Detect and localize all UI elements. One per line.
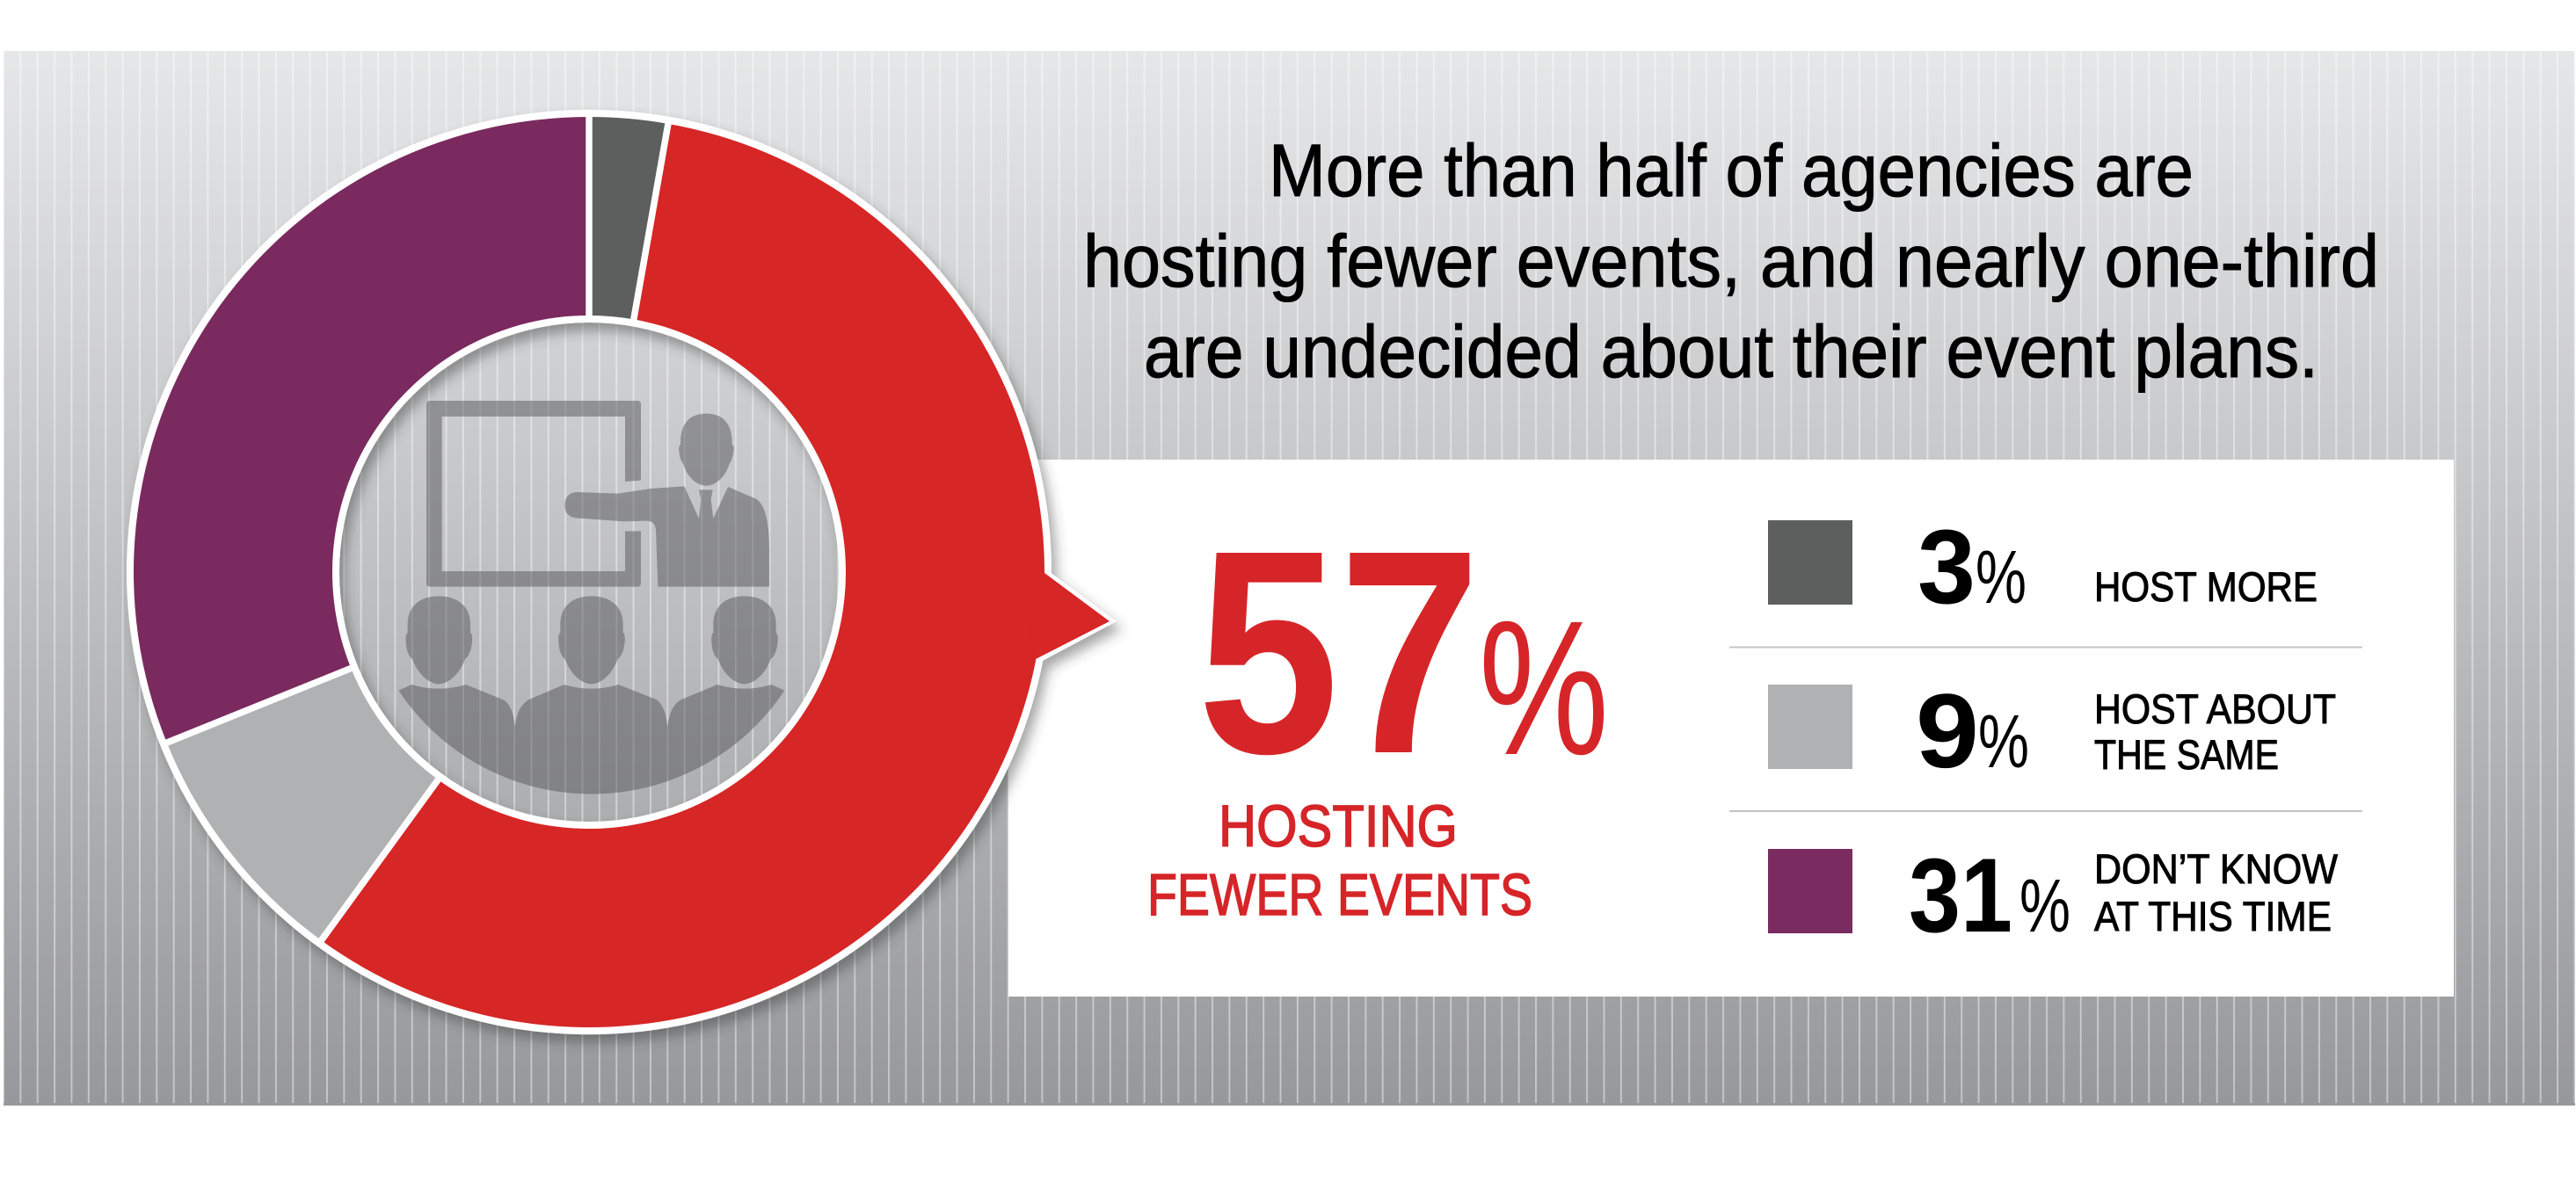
icon: presenter — [564, 414, 769, 587]
big stat: 57% hosting fewer events: FEWER EVENTS — [1147, 862, 1532, 928]
legend row: host more: 3 — [1917, 508, 1976, 626]
segment: hosting fewer events 57% — [322, 124, 1044, 1027]
divider — [1729, 647, 2362, 649]
icon: audience — [398, 596, 784, 794]
big stat: 57% hosting fewer events: % — [1479, 582, 1609, 795]
panel: white results panel — [1008, 460, 2454, 997]
callout pointer — [1029, 570, 1110, 660]
legend row: don't know at this time — [1768, 837, 2339, 954]
segment: don't know 31% — [134, 117, 589, 743]
legend row: host more: % — [1976, 536, 2027, 620]
legend row: don't know at this time: 31 — [1909, 837, 2012, 954]
legend row: host about the same — [1768, 672, 2336, 790]
segment dividers — [163, 112, 669, 944]
legend row: host more: HOST MORE — [2094, 563, 2318, 610]
legend row: don't know at this time: % — [2019, 865, 2070, 948]
big stat: 57% hosting fewer events — [1147, 489, 1609, 928]
heading: are undecided about their event plans. — [1144, 310, 2318, 393]
legend row: host more — [1768, 508, 2318, 626]
legend row: don't know at this time: AT THIS TIME — [2094, 893, 2332, 939]
legend row: host about the same: 9 — [1916, 672, 1979, 790]
divider — [1729, 810, 2362, 812]
donut chart with callout pointer — [127, 110, 1117, 1034]
legend row: don't know at this time: DON’T KNOW — [2094, 845, 2339, 892]
big stat: 57% hosting fewer events: 57 — [1197, 489, 1481, 814]
icon: presentation board — [426, 401, 641, 587]
legend row: host about the same: HOST ABOUT — [2094, 685, 2336, 732]
heading: hosting fewer events, and nearly one-third — [1083, 220, 2379, 302]
heading — [1083, 129, 2379, 393]
icon: presenter and audience — [398, 401, 784, 794]
big stat: 57% hosting fewer events: HOSTING — [1219, 794, 1458, 859]
legend row: host about the same: THE SAME — [2094, 731, 2279, 778]
legend row: host about the same: % — [1978, 700, 2029, 784]
heading: More than half of agencies are — [1269, 129, 2194, 212]
segment: host about the same 9% — [167, 668, 438, 940]
segment: host more 3% — [589, 117, 668, 319]
